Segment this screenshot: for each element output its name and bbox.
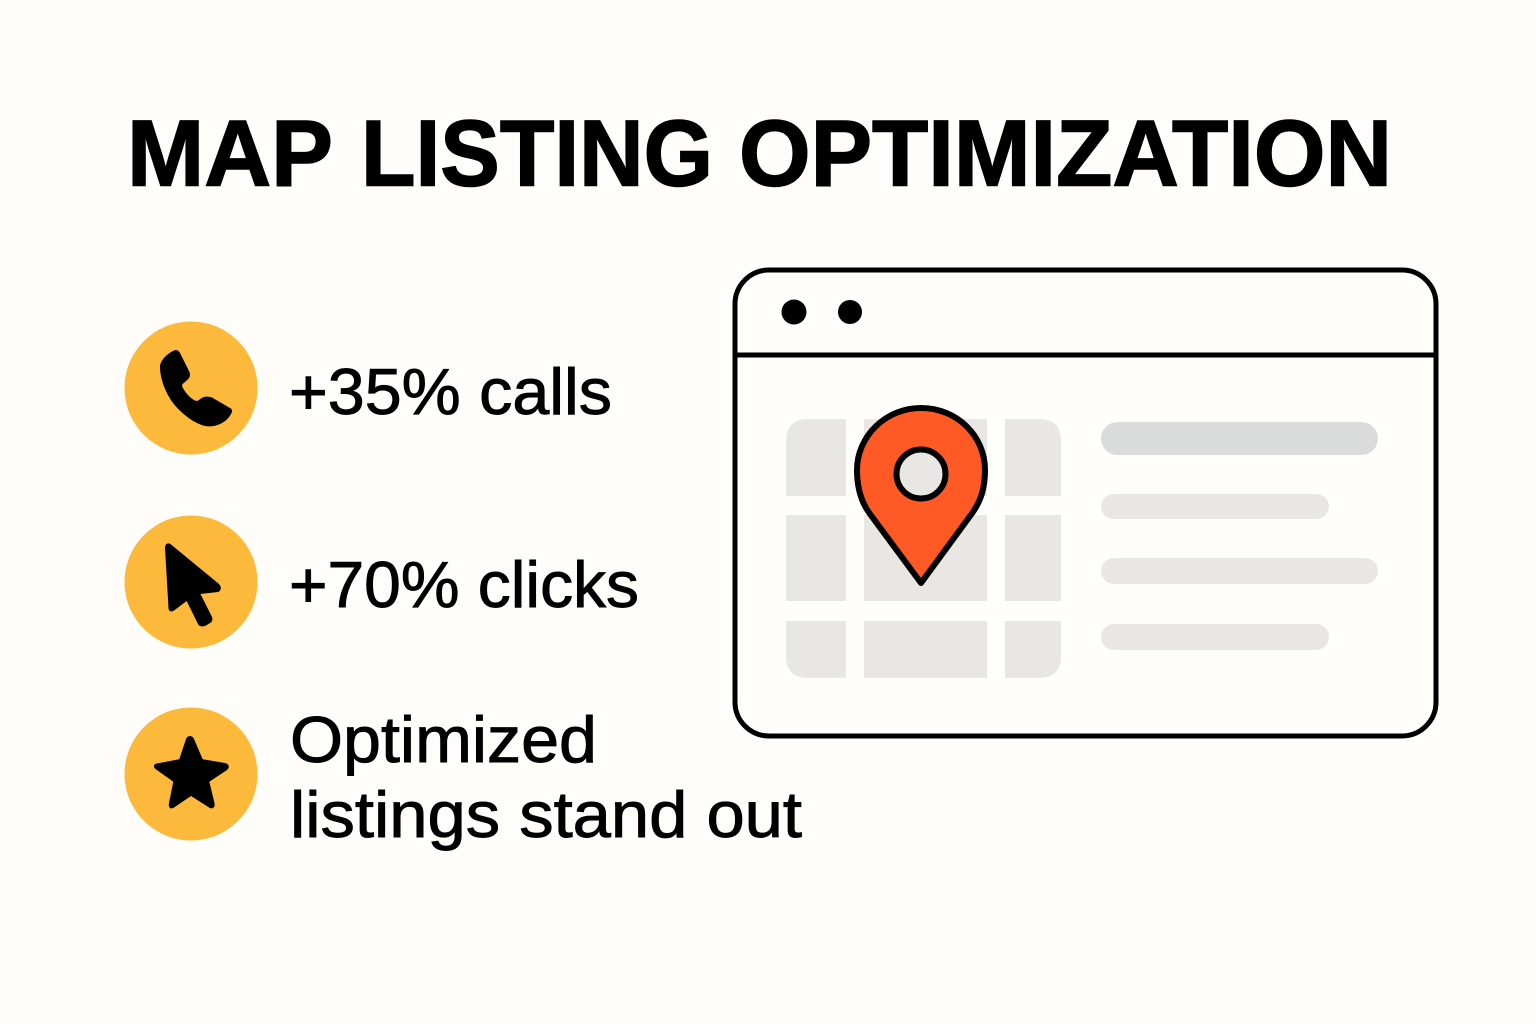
- title: OPTIMIZATION: [739, 100, 1392, 206]
- window frame: [735, 270, 1436, 736]
- header divider: [735, 352, 1436, 358]
- title: [127, 100, 1392, 206]
- panel: browser window: [735, 270, 1436, 736]
- icon: star: [124, 708, 258, 840]
- stat: clicks: [124, 516, 639, 648]
- text: +70% clicks: +70% clicks: [289, 548, 639, 621]
- text: Optimized listings stand out: Optimized: [290, 703, 597, 776]
- stat: optimized listings: [124, 703, 802, 851]
- stat: calls: [124, 322, 612, 454]
- icon: map pin: [857, 408, 985, 583]
- map grid: [786, 419, 1061, 678]
- title: MAP: [127, 100, 333, 206]
- text: Optimized listings stand out: listings stand out: [290, 778, 802, 851]
- window dots: [782, 300, 862, 324]
- icon: cursor: [124, 516, 258, 648]
- text: +35% calls: +35% calls: [289, 355, 612, 428]
- icon: phone: [124, 322, 258, 454]
- listing lines: [1101, 422, 1378, 650]
- text: Optimized listings stand out: [290, 703, 802, 851]
- title: LISTING: [361, 100, 713, 206]
